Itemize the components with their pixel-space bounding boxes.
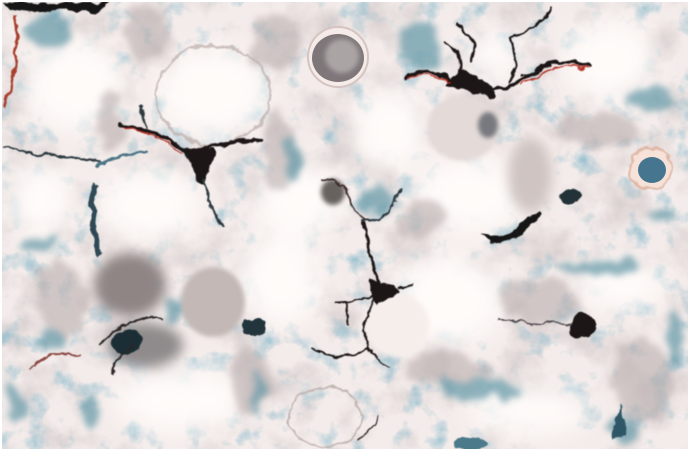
stain: bottom teal	[610, 405, 628, 440]
neuron: top right branching cell	[405, 8, 590, 97]
cell body: large pale upper left	[156, 45, 270, 145]
cell body: pale right of centre	[427, 95, 499, 161]
stain: lower left red edge	[30, 354, 80, 370]
stain: top left corner dark	[5, 3, 110, 14]
stain: right curved dark	[485, 212, 540, 241]
cell body: lower centre pale	[365, 293, 429, 357]
cell body: small grey centre nucleus	[321, 179, 345, 205]
cell body: right ring cell	[630, 148, 672, 190]
stain: right small dark	[559, 189, 581, 205]
cell body: right grey	[508, 137, 552, 213]
cell body: upper centre nucleus	[308, 27, 368, 87]
stain: centre dark	[243, 318, 264, 335]
stain: bottom cell process	[358, 415, 380, 440]
stain: lower right process	[500, 320, 570, 325]
stain: lower right dark	[570, 313, 596, 339]
stain: bottom centre teal	[452, 437, 488, 449]
stain: lower left processes	[100, 319, 165, 375]
stain: lower left dark	[111, 330, 141, 354]
cell body: grey left	[94, 253, 166, 317]
cell body: lower left grey	[107, 323, 183, 367]
cell body: dark spot in pale cell	[478, 112, 498, 138]
neuron: upper left branching cell	[5, 108, 262, 226]
neuron: centre vertical cell	[312, 180, 412, 366]
shaded cell bodies	[94, 27, 672, 447]
cell body: grey left centre	[181, 267, 245, 337]
cell body: bottom ring	[289, 387, 361, 447]
stain: left vertical	[93, 185, 100, 255]
stain: left edge red	[4, 15, 17, 105]
